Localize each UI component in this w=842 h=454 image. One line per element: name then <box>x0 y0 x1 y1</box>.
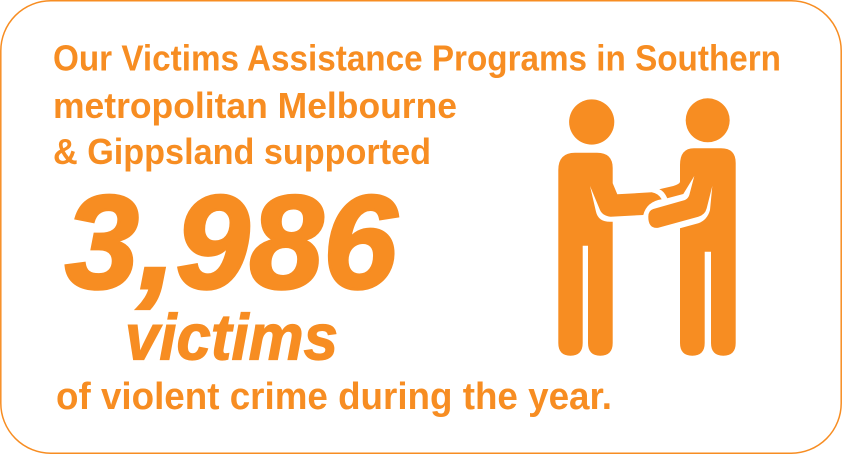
heading line 3: & Gippsland supported <box>53 131 431 172</box>
person left <box>558 99 662 356</box>
heading line 2: metropolitan Melbourne <box>53 85 457 126</box>
closing line: of violent crime during the year. <box>56 376 612 418</box>
person right <box>648 98 736 356</box>
heading line 1: Our Victims Assistance Programs in Southern <box>53 38 781 78</box>
big number: 3,986 <box>65 169 398 317</box>
victims label: victims <box>125 300 338 374</box>
icon: two people shaking hands <box>558 98 736 356</box>
